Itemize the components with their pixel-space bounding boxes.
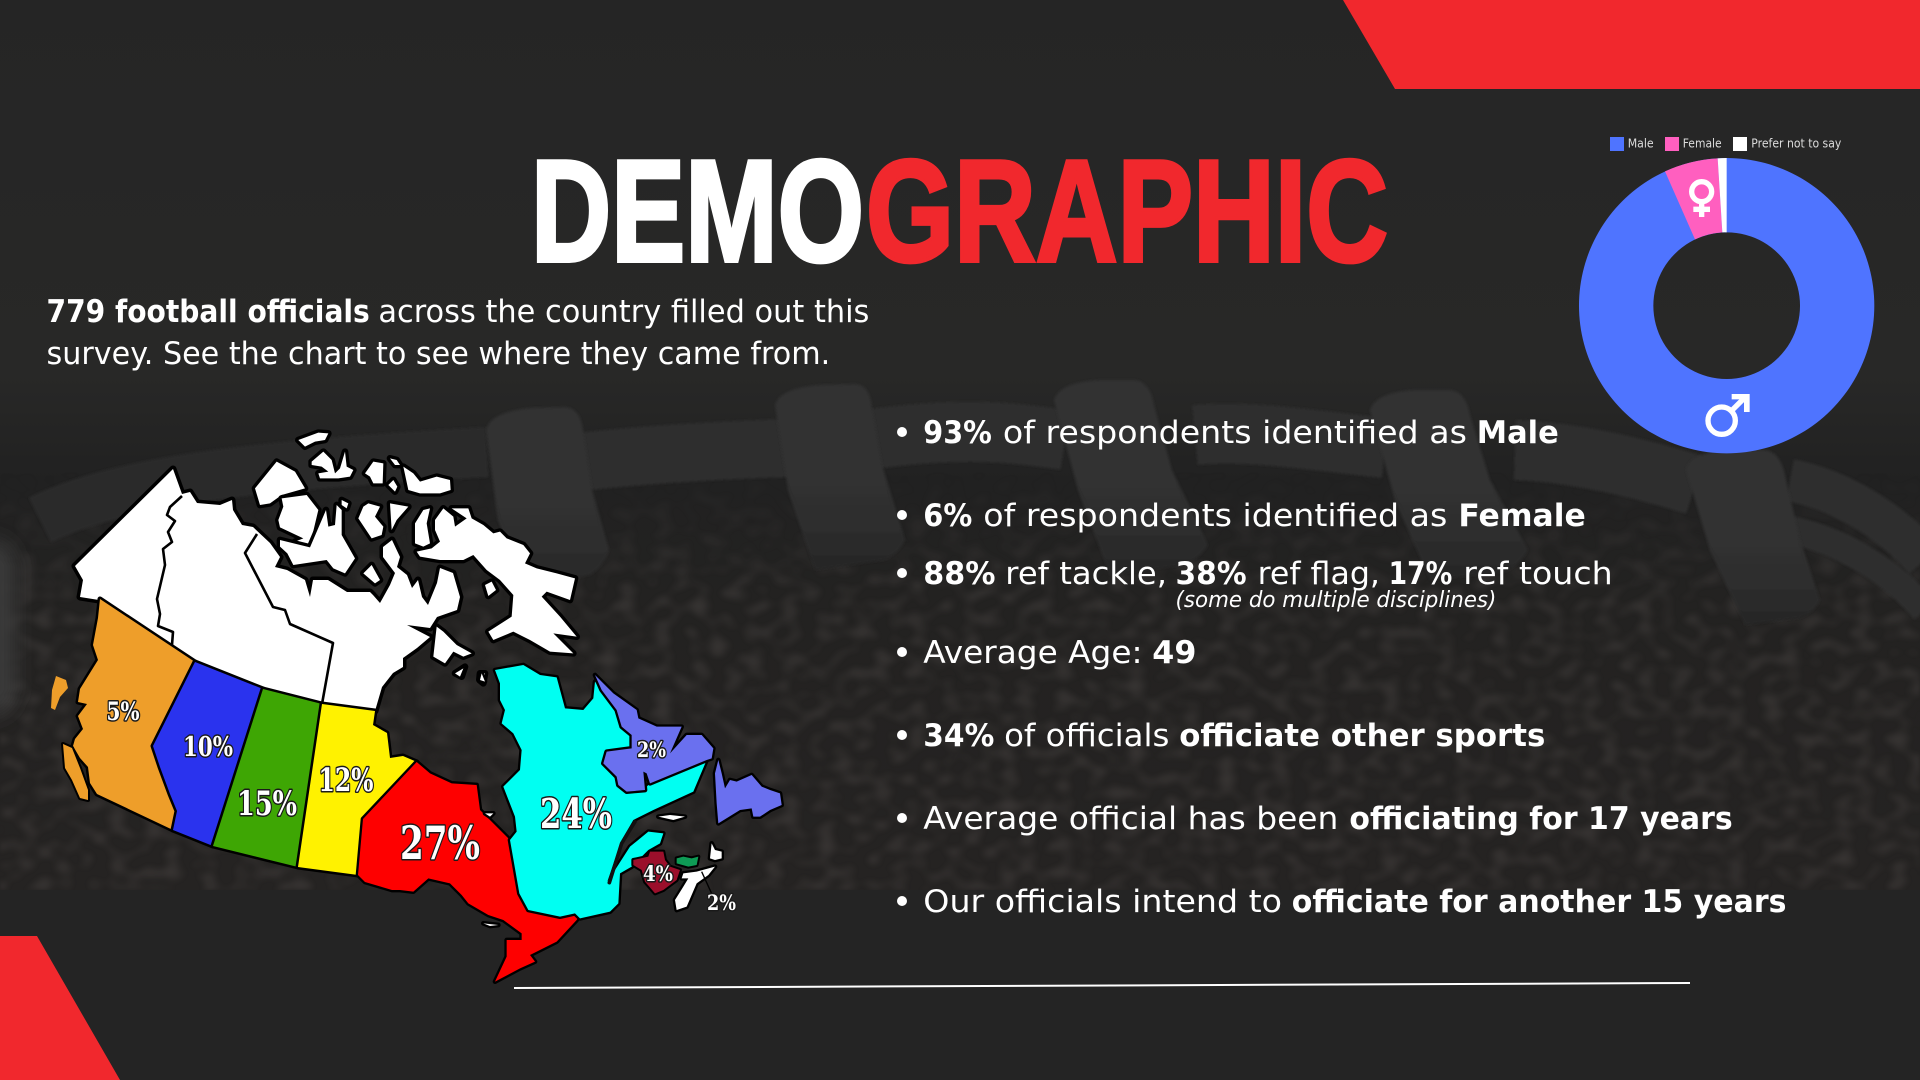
bullet: male share: of respondents identified as xyxy=(1003,415,1467,451)
Saskatchewan xyxy=(213,689,322,867)
territories: Yukon, NWT, Nunavut mainland xyxy=(75,469,460,711)
Ontario and east xyxy=(358,665,782,982)
slice: prefer not to say xyxy=(1718,158,1727,232)
bullet: other sports: officiate other sports xyxy=(1179,718,1545,754)
St Lawrence river xyxy=(609,822,635,883)
bullet: years remaining: Our officials intend to xyxy=(923,884,1282,920)
bullet: average age: 49 xyxy=(1152,635,1196,671)
bullet: disciplines: 17% xyxy=(1389,556,1452,592)
map percentage labels: 10% xyxy=(183,732,233,763)
territorial borders xyxy=(157,496,333,704)
chart legend: Prefer not to say xyxy=(1751,136,1841,150)
map percentage labels: 4% xyxy=(643,861,673,886)
arctic islands xyxy=(255,433,577,683)
bullet: years remaining: officiate for another 15 years xyxy=(1292,884,1786,920)
bullet: disciplines: ref tackle, xyxy=(1005,556,1167,592)
slice: male xyxy=(1579,158,1874,453)
bullet: other sports: 34% xyxy=(923,718,994,754)
intro text xyxy=(46,294,869,372)
bullet: disciplines: ref touch xyxy=(1463,556,1613,592)
Quebec xyxy=(495,665,707,918)
map percentage labels: 27% xyxy=(400,816,480,870)
map percentage labels: 2% xyxy=(637,737,666,762)
bullet: male share xyxy=(897,415,1559,451)
icon: male symbol xyxy=(1708,394,1750,434)
donut chart: gender xyxy=(1579,158,1874,453)
bullet: years remaining xyxy=(897,884,1786,920)
background: football laces xyxy=(0,380,1920,890)
map percentage labels: 15% xyxy=(237,784,297,824)
red corner bottom left xyxy=(0,936,120,1080)
map of Canada xyxy=(51,433,782,982)
bullet: disciplines: 88% xyxy=(923,556,996,592)
bullet: disciplines: ref flag, xyxy=(1258,556,1380,592)
intro text: 779 football officials xyxy=(46,294,370,330)
title xyxy=(531,130,1388,292)
intro text: survey. See the chart to see where they came from. xyxy=(46,336,830,372)
Prince Edward Island xyxy=(677,857,698,867)
bullet: years officiating xyxy=(897,801,1733,837)
map percentage labels: 2% xyxy=(707,890,736,915)
Manitoba xyxy=(298,704,417,875)
Nova Scotia xyxy=(455,668,722,926)
icon: female symbol xyxy=(1692,182,1712,217)
bullet: male share: Male xyxy=(1477,415,1559,451)
bullet: female share: Female xyxy=(1458,498,1586,534)
leader line to Maritimes label xyxy=(702,872,712,895)
chart legend xyxy=(1610,136,1841,151)
bullet: female share xyxy=(897,498,1586,534)
Ontario xyxy=(358,762,580,982)
map percentage labels: 5% xyxy=(106,697,140,726)
map percentage labels xyxy=(106,697,736,915)
bullet: disciplines: 38% xyxy=(1176,556,1247,592)
title: DEMO xyxy=(531,130,864,292)
bullet: other sports: of officials xyxy=(1004,718,1169,754)
title: GRAPHIC xyxy=(866,130,1388,292)
chart legend: Female xyxy=(1683,136,1722,150)
bullet: female share: of respondents identified as xyxy=(983,498,1447,534)
map percentage labels: 24% xyxy=(540,790,612,838)
chart legend: Male xyxy=(1628,136,1654,150)
red corner top right xyxy=(1343,0,1920,89)
bullet: other sports xyxy=(897,718,1545,754)
intro text: across the country filled out this xyxy=(378,294,869,330)
slice: female xyxy=(1665,158,1722,239)
bullet: disciplines: (some do multiple disciplines) xyxy=(1176,588,1496,613)
bullet: female share: 6% xyxy=(923,498,972,534)
bullet list of statistics xyxy=(897,415,1786,920)
map percentage labels: 12% xyxy=(318,761,374,799)
New Brunswick xyxy=(633,852,680,893)
Newfoundland and Labrador xyxy=(595,675,782,823)
bullet: average age: Average Age: xyxy=(923,635,1142,671)
bullet: disciplines xyxy=(897,556,1613,613)
British Columbia xyxy=(51,599,195,830)
bullet: average age xyxy=(897,635,1196,671)
bullet: years officiating: officiating for 17 years xyxy=(1349,801,1733,837)
bullet: years officiating: Average official has been xyxy=(923,801,1338,837)
Alberta xyxy=(153,662,263,846)
bullet: male share: 93% xyxy=(923,415,992,451)
